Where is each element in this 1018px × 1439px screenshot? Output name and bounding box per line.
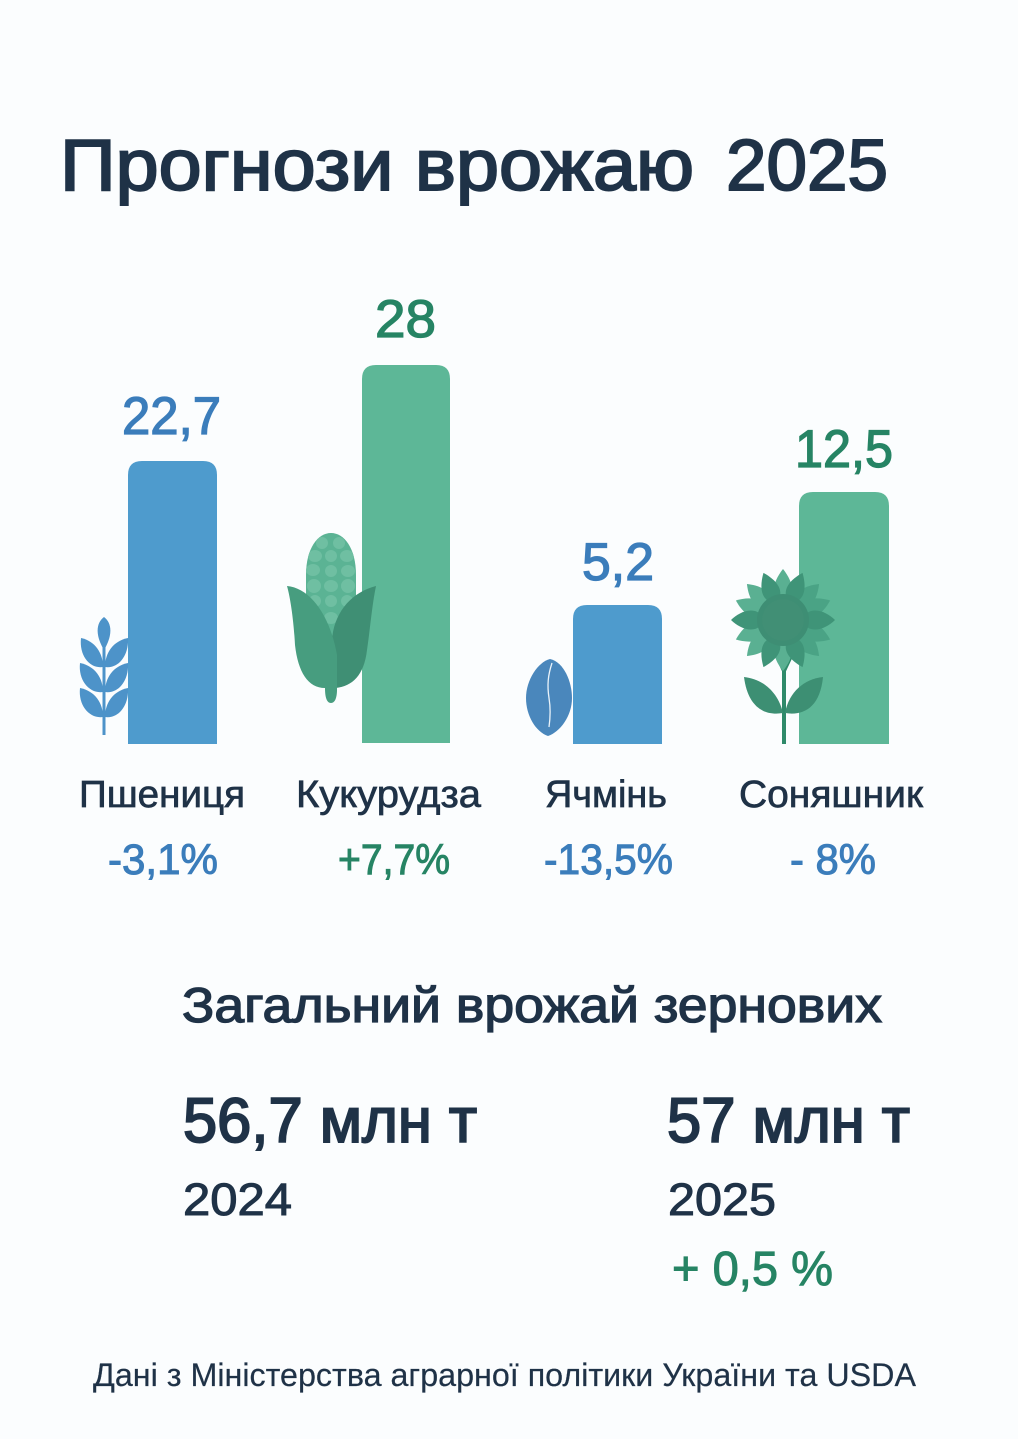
bar: wheat [128, 461, 217, 744]
value: barley: 5,2 [582, 533, 654, 592]
change: sunflower: - 8% [790, 836, 876, 884]
title: Прогнози врожаю [60, 126, 694, 206]
change: corn: +7,7% [338, 836, 450, 884]
bar: sunflower [799, 492, 889, 744]
heading: total grain harvest: Загальний врожай зернових [182, 979, 882, 1033]
value: corn: 28 [375, 290, 436, 349]
bar: barley [573, 605, 662, 744]
stat: 2025: + 0,5 % [672, 1243, 833, 1296]
icon: barley grain [526, 659, 572, 736]
label: barley: Ячмінь [545, 774, 667, 816]
stat: 2024 [183, 1086, 477, 1225]
bar: corn [362, 365, 450, 743]
icon: wheat [80, 617, 128, 735]
source note: Дані з Міністерства аграрної політики України та USDA [93, 1357, 916, 1393]
stat: 2024: 2024 [183, 1174, 292, 1225]
label: wheat: Пшениця [79, 774, 245, 816]
percent changes [108, 836, 876, 884]
stat: 2024: 56,7 млн т [183, 1086, 477, 1156]
title: 2025 [726, 126, 888, 206]
label: sunflower: Соняшник [739, 774, 923, 816]
stat: 2025: 57 млн т [667, 1086, 910, 1156]
value: sunflower: 12,5 [795, 420, 893, 479]
chart: bars [128, 365, 889, 744]
stat: 2025 [667, 1086, 910, 1296]
change: barley: -13,5% [544, 836, 673, 884]
stat: 2025: 2025 [668, 1174, 776, 1225]
icon: corn [287, 533, 376, 703]
crop names [79, 774, 923, 816]
value: wheat: 22,7 [122, 387, 221, 446]
icon: sunflower [731, 569, 835, 744]
value labels [122, 290, 893, 592]
change: wheat: -3,1% [108, 836, 218, 884]
label: corn: Кукурудза [296, 774, 482, 816]
